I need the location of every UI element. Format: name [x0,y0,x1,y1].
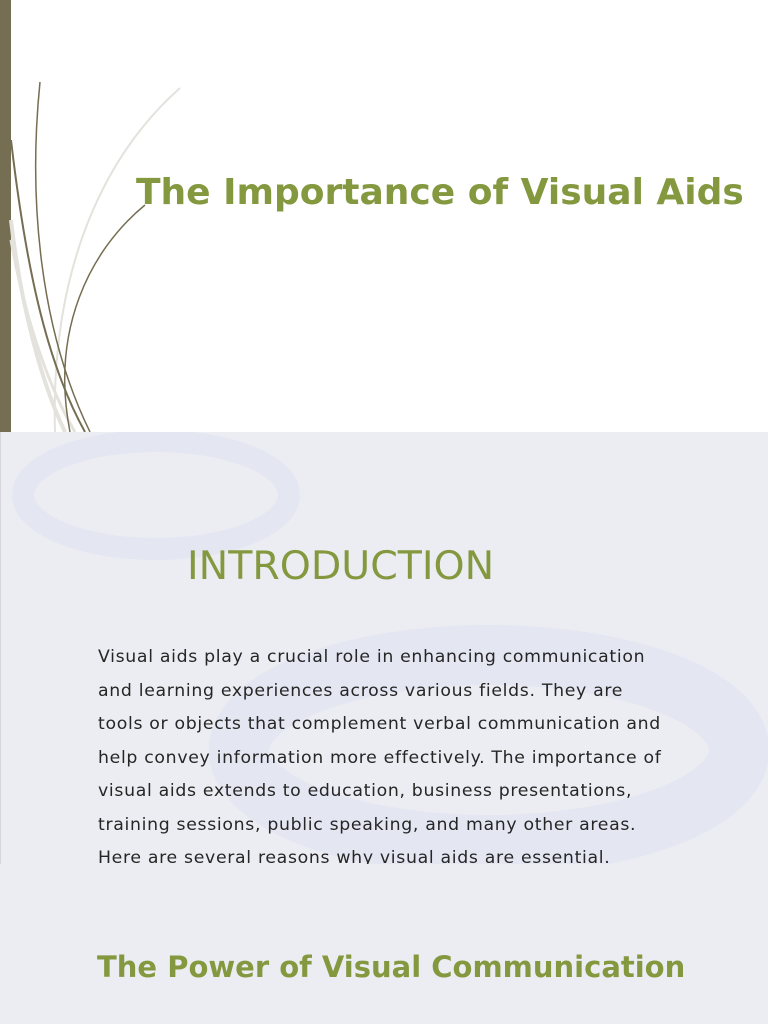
text block: intro paragraph: Visual aids play a crucial role in enhancing communication [98,647,645,667]
text block: intro paragraph: help convey information more effectively. The importance of [98,748,662,768]
decorative rings [1,432,768,864]
panel: title slide [0,0,768,432]
heading: The Power of Visual Communication [97,950,685,984]
decorative left bar [0,0,11,432]
title: The Importance of Visual Aids [136,172,744,213]
text block: intro paragraph [98,647,662,864]
text block: intro paragraph: tools or objects that complement verbal communication and [98,714,661,734]
text block: intro paragraph: and learning experiences across various fields. They are [98,680,623,700]
text block: intro paragraph: training sessions, public speaking, and many other areas. [98,814,636,834]
heading: INTRODUCTION: INTRODUCTION [187,543,494,589]
icon: grass curves [9,82,180,432]
panel: introduction [0,432,768,864]
text block: intro paragraph: visual aids extends to education, business presentations, [98,781,632,801]
panel: power of visual communication [0,864,768,1024]
